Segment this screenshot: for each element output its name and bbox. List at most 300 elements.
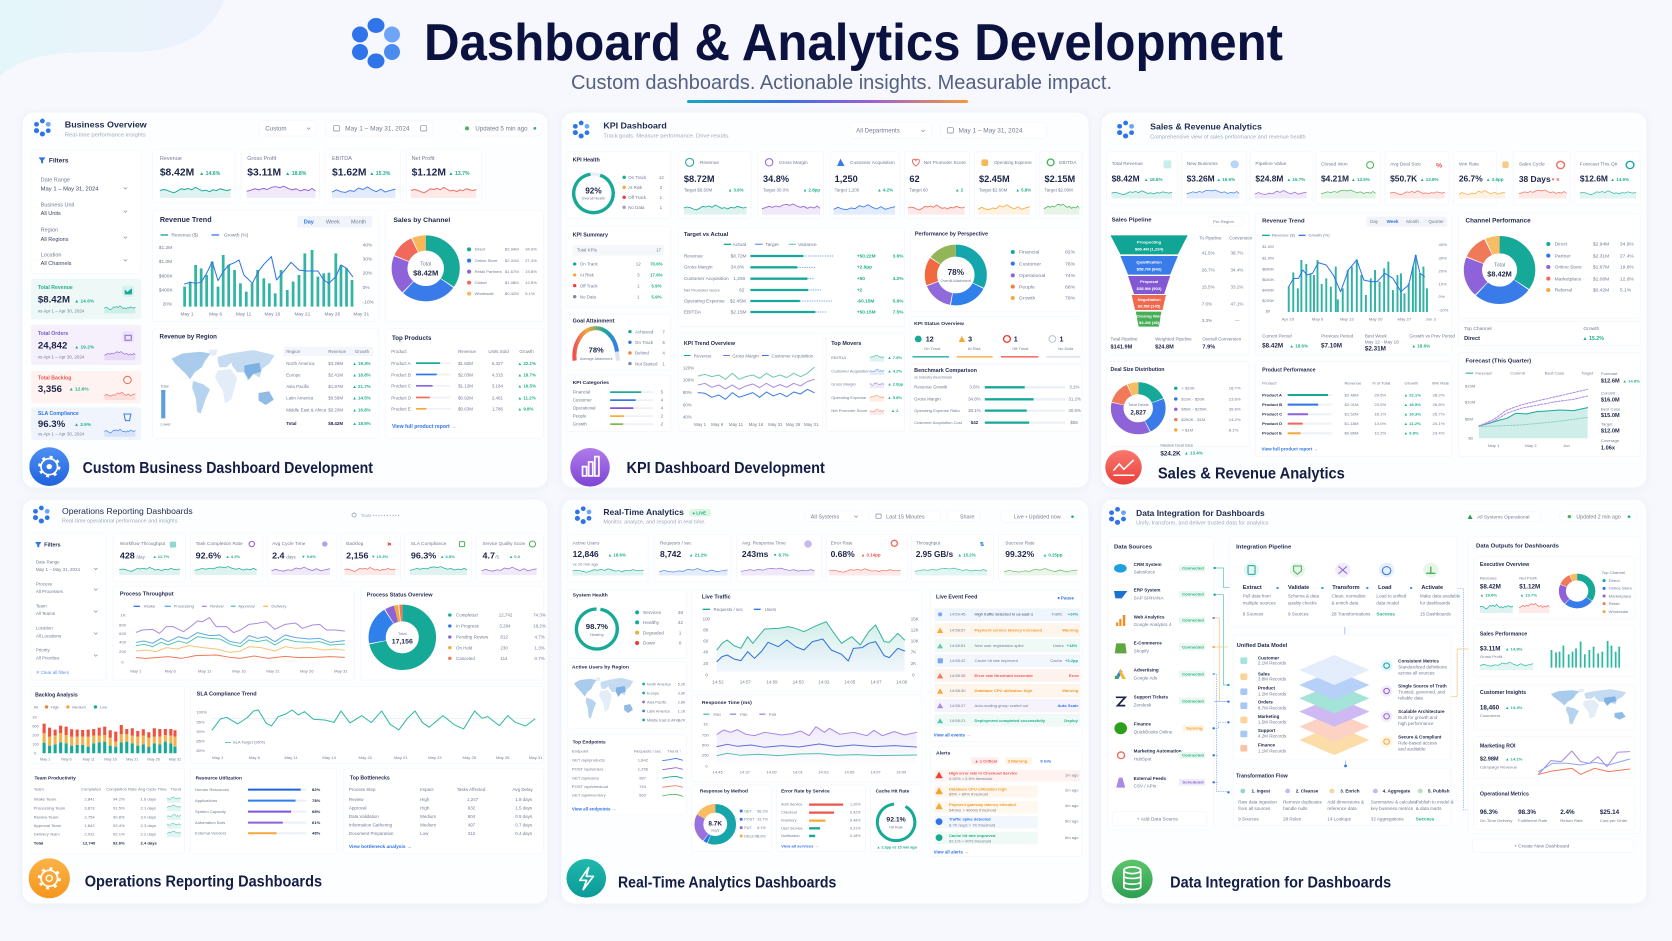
- chart: process status overview: 1.3%: [535, 645, 545, 650]
- transformation flow: 2. Cleanse: [1296, 789, 1319, 794]
- filters panel: Region: [41, 227, 58, 233]
- chart: backlog analysis: [31, 687, 185, 763]
- chart: error rate by service: Checkout: [781, 811, 797, 815]
- map: revenue by region: ▲ 21.7%: [352, 384, 371, 389]
- kpi categories: Growth: [573, 422, 587, 427]
- header: [62, 506, 400, 525]
- executive overview: Retail: [1609, 601, 1619, 606]
- chart: target vs actual: 62: [739, 287, 745, 293]
- chart: revenue trend: May 31: [353, 312, 370, 318]
- chart: response time: 14:37: [740, 769, 751, 774]
- table: top bottlenecks: 1.8 days: [515, 797, 533, 802]
- live event feed: New user registration spike: [975, 643, 1025, 648]
- unified data model: Secure & Compliant: [1398, 734, 1442, 739]
- header: Updated 5 min ago: [475, 125, 528, 132]
- chart: forecast: Best Case: [1545, 371, 1565, 376]
- filters panel: [31, 150, 141, 273]
- table: team productivity: 94.2%: [113, 797, 125, 802]
- map: active users by region: Europe: [647, 691, 659, 695]
- top movers: ▲ 4.2%: [888, 368, 902, 373]
- table: team productivity: 2.1 days: [141, 806, 156, 811]
- map: active users by region: [568, 662, 686, 728]
- table: top bottlenecks: 497: [468, 822, 476, 827]
- table: team productivity: 93.4%: [113, 823, 125, 828]
- resource utilization: Human Resources: [195, 787, 229, 792]
- transformation flow: from all sources: [1238, 806, 1271, 811]
- chart: kpi trend overview: 100%: [683, 378, 694, 383]
- table: product performance: $0.86M: [1345, 431, 1359, 436]
- alerts: 540ms > 400ms threshold: [949, 807, 996, 812]
- benchmark comparison: [911, 365, 1082, 432]
- live event feed: 14:58:51: [950, 643, 966, 648]
- kpi health gauge: KPI Health: [573, 158, 600, 164]
- kpi summary: 5.9%: [651, 294, 662, 299]
- chart: target vs actual: Gross Margin: [684, 264, 713, 270]
- chart: sla compliance trend: 85%: [196, 738, 205, 743]
- sales performance: [1474, 625, 1635, 677]
- alerts: 8.7K req/s > 7K threshold: [949, 822, 995, 827]
- chart: channel performance: Marketplace: [1555, 276, 1582, 282]
- chart: channel performance: 34.9%: [1620, 242, 1635, 248]
- chart: response time: 14:01: [793, 769, 804, 774]
- funnel: sales pipeline: Negotiation: [1138, 297, 1161, 302]
- chart: deal size distribution: 35.6%: [1229, 407, 1241, 412]
- benchmark comparison: 30.5%: [1068, 408, 1081, 413]
- header: Real-time operational performance and insights: [62, 519, 178, 525]
- chart: revenue trend: May 27: [1397, 317, 1412, 322]
- kpi cards row: $4.21M: [1321, 175, 1349, 183]
- header: [1150, 122, 1306, 140]
- data sources list: CRM System: [1134, 562, 1162, 567]
- funnel: sales pipeline: $24.8M: [1155, 345, 1174, 351]
- kpi cards row: 96.3%: [411, 550, 436, 560]
- chart: revenue trend: May 26: [324, 312, 341, 318]
- map: revenue by region: Revenue: [328, 349, 347, 354]
- chart: channel performance: $1.67M: [1593, 265, 1609, 271]
- chart: response by method: 56.2%: [757, 809, 769, 813]
- unified data model: Role-based access: [1398, 740, 1438, 745]
- chart: sla compliance trend: May 1: [212, 755, 224, 760]
- live event feed: Database CPU utilization high: [975, 688, 1033, 693]
- chart: live traffic: 14:07: [870, 680, 882, 685]
- chart: response time: 1K: [703, 722, 709, 727]
- integration pipeline: Pull data from: [1243, 594, 1271, 599]
- filters panel: All Priorities: [36, 656, 60, 661]
- kpi cards row: Error Rate: [831, 540, 853, 546]
- customer insights: Customer Insights: [1480, 690, 1526, 696]
- system health gauge: 1: [679, 630, 682, 636]
- map: revenue by region: $2.41M: [328, 372, 343, 377]
- table: team productivity: Completed: [81, 787, 101, 792]
- kpi summary: 17.6%: [650, 273, 663, 278]
- unified data model: Unified Data Model: [1237, 643, 1288, 649]
- resource utilization: 78%: [312, 798, 321, 803]
- accent bar: [687, 100, 968, 103]
- kpi cards row: ▲ 0.25pp: [1043, 553, 1063, 558]
- table: product performance: 28.2%: [1433, 392, 1445, 397]
- unified data model: Product: [1258, 686, 1276, 691]
- header: Comprehensive view of sales performance and revenue health: [1150, 134, 1306, 140]
- chart: target vs actual: +2.8pp: [857, 264, 872, 270]
- transformation flow: Add dimensions &: [1327, 799, 1364, 804]
- operational metrics: [1474, 785, 1635, 830]
- chart: revenue trend: Month: [1406, 219, 1419, 224]
- operational metrics: Cost per Order: [1600, 818, 1628, 823]
- funnel: sales pipeline: Sales Pipeline: [1112, 218, 1152, 224]
- chart: backlog analysis: May 21: [126, 757, 138, 761]
- chart: process throughput: 400: [119, 639, 127, 644]
- goal attainment gauge: Goal Attainment: [573, 318, 615, 324]
- map: revenue by region: Europe: [286, 372, 301, 377]
- chart: revenue trend: 40%: [1439, 242, 1447, 247]
- unified data model: across all sources: [1398, 670, 1435, 675]
- kpi cards row: ▼ 9.6%: [301, 554, 316, 559]
- chart: performance by perspective: Customer: [1019, 261, 1041, 267]
- kpi card: customer acquisition: 1,250: [835, 174, 858, 184]
- table: top products: $2.03M: [458, 372, 473, 377]
- kpi cards row: ▲ 15.2%: [957, 553, 976, 558]
- stat card: sla compliance: 96.3%: [38, 419, 66, 430]
- table: team productivity: 2.4 days: [141, 841, 158, 846]
- unified data model: Orders: [1258, 700, 1273, 705]
- chart: live traffic: Users: [765, 607, 777, 612]
- kpi card: nps: Net Promoter Score: [924, 160, 966, 166]
- integration pipeline: Integration Pipeline: [1236, 544, 1292, 550]
- chart: error rate by service: Auth Service: [781, 803, 802, 807]
- connector lines: [1212, 567, 1468, 810]
- table: top endpoints: 743: [639, 784, 647, 789]
- funnel: sales pipeline: 38.7%: [1230, 251, 1243, 256]
- table: top endpoints: Requests / sec: [634, 749, 661, 754]
- funnel: sales pipeline: 41.5%: [1202, 251, 1215, 256]
- chart: error rate by service: Notification: [781, 834, 800, 838]
- chart: process status overview: 4.7%: [535, 635, 545, 640]
- filters panel: May 1 – May 31, 2024: [41, 186, 99, 192]
- chart: kpi trend overview: 80%: [683, 390, 692, 395]
- alerts: View all alerts →: [934, 850, 968, 855]
- kpi cards row: /day: [136, 554, 146, 559]
- table: top bottlenecks: Data Validation: [349, 814, 379, 819]
- chart: target vs actual: Actual: [733, 242, 746, 248]
- kpi card: ebitda: $2.15M: [1045, 174, 1075, 184]
- kpi cards row: ▼ 5: [1551, 177, 1560, 182]
- header: May 1 – May 31, 2024: [959, 127, 1023, 134]
- table: top endpoints: GET /api/products: [572, 757, 605, 762]
- kpi card: revenue: [678, 152, 751, 218]
- resource utilization: [190, 768, 337, 853]
- chart: revenue trend: 20%: [363, 270, 373, 276]
- table: team productivity: Team Productivity: [34, 775, 76, 781]
- marketing roi: $2.98M: [1480, 757, 1499, 763]
- funnel: sales pipeline: Overall Conversion: [1202, 336, 1242, 341]
- caption: Data Integration for Dashboards: [1170, 875, 1391, 892]
- filters panel: Date Range: [41, 177, 70, 183]
- integration pipeline: Make data available: [1420, 594, 1461, 599]
- chart: sla compliance trend: May 26: [496, 755, 510, 760]
- table: top products: ▲ 11.2%: [518, 395, 536, 400]
- table: product performance: $2.48M: [1345, 392, 1359, 397]
- funnel: sales pipeline: $9.5M (145): [1138, 303, 1161, 308]
- chart: error rate by service: Inventory: [781, 819, 797, 823]
- stat card: total orders: Total Orders: [38, 331, 68, 337]
- live event feed: Deployment completed successfully: [975, 718, 1046, 723]
- filters panel: ✕ Clear all filters: [36, 670, 70, 675]
- operational metrics: Fulfillment Rate: [1518, 818, 1548, 823]
- kpi summary: KPI Summary: [573, 233, 608, 239]
- chart: target vs actual: $8.72M: [731, 253, 747, 259]
- chart: revenue trend: 10%: [1439, 281, 1447, 286]
- chart: sales by channel donut: 19.8%: [525, 269, 537, 274]
- kpi cards row: Avg Cycle Time: [272, 541, 306, 547]
- unified data model: Scalable Architecture: [1398, 709, 1445, 714]
- kpi health gauge: 3: [660, 185, 663, 190]
- kpi summary: 5.9%: [651, 283, 662, 288]
- chart: revenue trend: $600K: [1262, 277, 1274, 282]
- map: revenue by region: Latin America: [286, 396, 314, 401]
- kpi cards row: ▲ 21.2%: [689, 553, 707, 558]
- table: product performance: Revenue: [1345, 381, 1362, 386]
- chart: sla compliance trend: SLA Compliance Trend: [197, 691, 257, 697]
- chart: live traffic: 40: [703, 650, 709, 655]
- chart: channel performance: [1459, 213, 1640, 318]
- header: [603, 507, 1082, 526]
- table: top endpoints: Top Endpoints: [573, 739, 606, 745]
- executive overview: $8.42M: [1480, 583, 1501, 590]
- chart: live traffic: 14:52: [713, 680, 724, 685]
- goal attainment gauge: Behind: [635, 351, 649, 356]
- chart: response by method: POST: [744, 818, 755, 822]
- table: product performance: Product: [1262, 381, 1277, 386]
- chart: target vs actual: 3.6%: [893, 253, 904, 259]
- chart: response time: 750: [702, 732, 710, 737]
- cache hit rate gauge: Cache Hit Rate: [876, 789, 910, 795]
- kpi cards row: ▼ 8.7%: [773, 553, 789, 558]
- kpi cards row: $3.26M: [1187, 175, 1215, 183]
- chart: revenue trend: Apr 29: [1282, 317, 1295, 322]
- chart: backlog analysis: May 11: [83, 757, 95, 761]
- table: product performance: Product D: [1262, 421, 1282, 426]
- kpi status overview: 12: [926, 336, 934, 344]
- live event feed: 14:58:36: [950, 673, 966, 678]
- map: active users by region: Asia Pacific: [647, 700, 667, 704]
- kpi summary: 70.6%: [650, 262, 663, 267]
- filters panel: Date Range: [36, 559, 60, 564]
- filters panel: All Units: [41, 211, 61, 217]
- chart: target vs actual: [678, 228, 905, 327]
- resource utilization: Automation Bots: [195, 820, 225, 825]
- chart: sales by channel donut: 5.1%: [525, 291, 535, 296]
- table: top endpoints: 987: [639, 775, 647, 780]
- chart: revenue trend: $8.42M: [1262, 342, 1283, 349]
- chart: performance by perspective: 74%: [1065, 273, 1076, 279]
- map: active users by region: 3.9K: [678, 691, 686, 695]
- unified data model: 1.5M Records: [1258, 720, 1287, 725]
- kpi card: revenue: Revenue: [700, 160, 719, 166]
- table: team productivity: Total: [34, 841, 43, 846]
- stat card: total orders: 24,842: [38, 341, 67, 352]
- chart: live traffic: [691, 590, 922, 692]
- live event feed: 14:59:45: [950, 612, 966, 617]
- resource utilization: Resource Utilization: [196, 775, 242, 781]
- resource utilization: 61%: [312, 820, 321, 825]
- system health gauge: Services: [643, 610, 662, 616]
- alerts: Database CPU utilization high: [949, 786, 1007, 791]
- map: revenue by region: $1.87M: [328, 384, 343, 389]
- caption: Operations Reporting Dashboards: [85, 874, 322, 891]
- table: top products: Product A: [391, 361, 411, 366]
- benchmark comparison: Revenue Growth: [914, 385, 948, 390]
- executive overview: Online Store: [1609, 586, 1633, 591]
- executive overview: Revenue: [1480, 575, 1497, 580]
- kpi cards row: 12,846: [573, 549, 599, 559]
- benchmark comparison: 3.1%: [1069, 385, 1080, 390]
- integration pipeline: quality checks: [1288, 600, 1317, 605]
- chart: live traffic: Requests / sec: [714, 607, 744, 612]
- map: revenue by region: North America: [286, 361, 315, 366]
- table: top products: [386, 328, 543, 438]
- map: active users by region: North America: [647, 682, 672, 686]
- chart: forecast: ▲ 14.6%: [1623, 379, 1640, 384]
- table: team productivity: 12,740: [83, 841, 96, 846]
- table: team productivity: 92.1%: [113, 831, 125, 836]
- chart: process status overview: 812: [500, 635, 508, 640]
- table: team productivity: Team: [34, 787, 44, 792]
- chart: channel performance: Channel Performance: [1466, 218, 1531, 225]
- chart: revenue trend: Growth (%): [1308, 233, 1330, 238]
- kpi categories: 4: [661, 398, 664, 403]
- kpi cards row: 2,156: [346, 550, 369, 560]
- kpi card: gross profit: [241, 149, 320, 203]
- filters panel: Filters: [44, 543, 61, 549]
- chart: revenue trend: 20%: [1439, 268, 1447, 273]
- chart: sales by channel donut: $8.42M: [413, 269, 438, 278]
- stat card: sla compliance: vs Apr 1 – Apr 30, 2024: [38, 432, 85, 437]
- transformation flow: 3. Enrich: [1340, 789, 1360, 794]
- stat card: total orders: ▲ 19.2%: [74, 345, 95, 351]
- goal attainment gauge: 5: [662, 340, 665, 345]
- kpi categories: Operational: [573, 406, 596, 411]
- chart: backlog analysis: May 6: [61, 757, 72, 761]
- live event feed: Cache hit rate improved: [975, 658, 1018, 663]
- chart: forecast: Best Case: [1601, 406, 1621, 411]
- chart: revenue trend: $2.31M: [1365, 346, 1386, 353]
- chart: forecast: $12.6M: [1601, 379, 1620, 385]
- stat card: total revenue: vs Apr 1 – Apr 30, 2024: [38, 308, 85, 313]
- chart: process status overview: [361, 587, 546, 680]
- kpi cards row: $12.6M: [1580, 175, 1608, 183]
- chart: revenue trend: 30%: [1439, 255, 1447, 260]
- funnel: sales pipeline: 7.9%: [1202, 345, 1215, 351]
- chart: backlog analysis: All: [34, 705, 38, 709]
- live event feed: Traffic: [1051, 612, 1062, 617]
- goal attainment gauge: 4: [662, 351, 665, 356]
- chart: forecast: Coverage: [1601, 438, 1620, 443]
- chart: live traffic: 12K: [911, 628, 919, 633]
- chart: process throughput: May 31: [334, 668, 348, 673]
- marketing roi: Marketing ROI: [1480, 743, 1516, 749]
- chart: revenue trend: Week: [1387, 219, 1399, 224]
- chart: process throughput: Processing: [174, 604, 194, 609]
- benchmark comparison: Customer Acquisition Cost: [914, 420, 963, 425]
- table: top endpoints: Endpoint: [572, 749, 589, 754]
- funnel: sales pipeline: $58.7M (842): [1137, 267, 1162, 272]
- table: top products: $1.12M: [458, 384, 473, 389]
- chart: response by method: PUT: [744, 826, 752, 830]
- chart: error rate by service: 0.31%: [850, 826, 861, 830]
- table: product performance: Win Rate: [1432, 381, 1450, 386]
- kpi card: ebitda: Target $2.00M: [1045, 188, 1073, 193]
- system health gauge: Degraded: [643, 630, 664, 636]
- data sources list: Advertising: [1134, 667, 1159, 672]
- transformation flow: Summarize & calculate: [1371, 799, 1418, 804]
- table: top products: 4,315: [492, 372, 504, 377]
- chart: revenue trend: 20%: [163, 301, 173, 307]
- chart: backlog analysis: May 16: [104, 757, 117, 761]
- chart: kpi trend overview: KPI Trend Overview: [684, 341, 736, 347]
- chart: response by method: req/s: [711, 828, 720, 832]
- operational metrics: 96.3%: [1480, 809, 1498, 816]
- top channel summary: Growth: [1583, 326, 1600, 332]
- filters panel: All Processes: [36, 589, 64, 594]
- table: product performance: ▲ 22.1%: [1404, 392, 1421, 397]
- chart: revenue trend: $1.2M: [159, 245, 172, 251]
- kpi cards row: ▲ 0.3: [509, 554, 521, 559]
- chart: deal size distribution: Total Deals: [1128, 402, 1149, 407]
- kpi cards row: 8,742: [660, 549, 682, 559]
- logo: [352, 18, 400, 68]
- live event feed: Cache: [1050, 658, 1063, 663]
- chart: response time: 250: [702, 752, 710, 757]
- customer insights: ▲ 13.4%: [1505, 705, 1523, 710]
- table: product performance: Growth: [1404, 381, 1419, 386]
- map: revenue by region: [153, 328, 378, 438]
- funnel: sales pipeline: Prospecting: [1137, 239, 1162, 244]
- kpi cards row: Win Rate: [1459, 162, 1479, 168]
- table: top bottlenecks: Impact: [420, 787, 434, 792]
- unified data model: Standardized definitions: [1398, 664, 1448, 669]
- kpi cards row: ▲ 0.14pp: [861, 553, 881, 558]
- header: Data Integration for Dashboards: [1136, 509, 1265, 518]
- chart: forecast: $15M: [1465, 383, 1476, 388]
- chart: backlog analysis: 200: [32, 734, 39, 738]
- panel: data integration: [1101, 499, 1647, 904]
- stat card: total revenue: $8.42M: [38, 295, 70, 306]
- kpi card: nps: [905, 152, 969, 218]
- chart: process status overview: Total: [398, 631, 407, 636]
- alerts: Payment gateway latency elevated: [949, 802, 1016, 807]
- kpi card: revenue: ▲ 14.6%: [199, 171, 221, 177]
- chart: sales by channel donut: $0.42M: [505, 291, 519, 296]
- map: revenue by region: Region: [286, 349, 301, 354]
- chart: channel performance: Referral: [1555, 288, 1572, 294]
- chart: deal size distribution: 2,827: [1130, 409, 1147, 416]
- kpi cards row: days: [286, 554, 296, 559]
- alerts: 85% > 80% threshold: [949, 792, 988, 797]
- kpi cards row: Pipeline Value: [1255, 161, 1287, 167]
- chart: forecast: $15.0M: [1601, 413, 1620, 419]
- chart: target vs actual: +50: [857, 276, 865, 282]
- executive overview: ▲ 13.7%: [1520, 593, 1537, 598]
- live event feed: Warning: [1062, 688, 1079, 693]
- kpi card: net profit: Net Profit: [412, 156, 435, 162]
- chart: process throughput: May 21: [266, 668, 280, 673]
- chart: performance by perspective: Operational: [1019, 273, 1045, 279]
- filters panel: Team: [36, 603, 47, 608]
- chart: deal size distribution: Deal Size Distribution: [1111, 367, 1165, 373]
- funnel: sales pipeline: 7.0%: [1202, 302, 1212, 307]
- table: top endpoints: Trend ↑: [667, 749, 681, 754]
- chart: kpi trend overview: Customer Acquisition: [772, 353, 814, 358]
